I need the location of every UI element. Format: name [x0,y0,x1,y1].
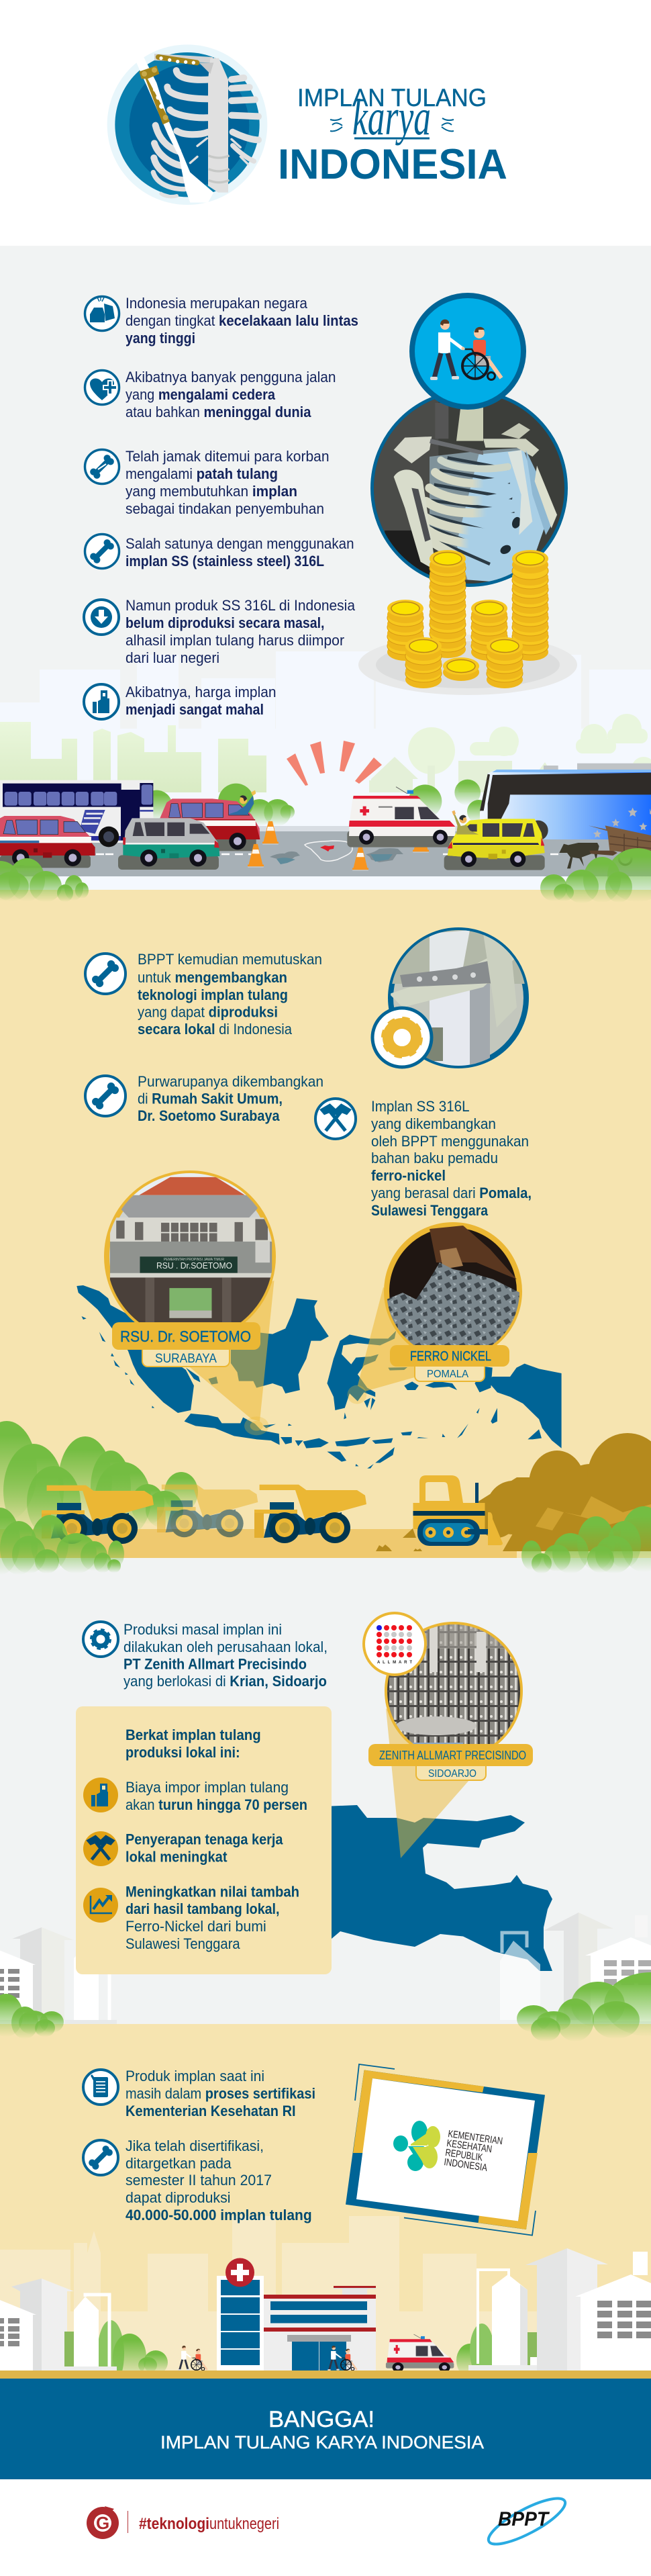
icon + text: BPPT decision: secara lokal di Indonesia [138,1021,293,1038]
icon: down arrow + text 5: dari luar negeri [126,649,219,666]
icon: crash + text 1: yang tinggi [126,330,195,347]
logo: BPPT [483,2491,570,2552]
icon: heart + text 2: atau bahkan meninggal dunia [126,404,311,420]
vehicles: ambulance, bus, van and ox cart [347,764,651,870]
icon + text: BPPT decision [85,951,322,1038]
dump trucks [42,1485,366,1544]
trees: section 3 bottom [0,1972,651,2041]
pale city silhouette: section 4 [0,2216,651,2371]
icon + text: mass production: yang berlokasi di Krian, Sidoarjo [123,1673,327,1690]
logo: hashtag G: G [96,2513,109,2533]
hospital scene: right buildings and trees [456,2248,651,2377]
logo: hashtag G [87,2506,279,2539]
label: Ferro Nickel Pomala: POMALA [427,1369,468,1380]
icon + text: ferro-nickel material: oleh BPPT menggunakan [371,1133,529,1150]
icon: heart + text 2 [85,369,336,420]
photo circle: skeleton with implants [371,393,568,589]
icon + text: production target: Jika telah disertifikasi, [126,2137,264,2154]
icon: money hand + text 6: menjadi sangat mahal [126,701,264,718]
label: Zenith Allmart Precisindo Sidoarjo: ZENITH ALLMART PRECISINDO [379,1749,526,1762]
hospital scene: left buildings and trees [0,2279,168,2387]
icon: down arrow + text 5 [84,597,356,666]
label: RSU Dr. Soetomo Surabaya: SURABAYA [155,1352,217,1366]
framed logo: Kementerian Kesehatan: KEMENTERIAN [447,2128,503,2147]
foreground trees: mine scene [0,1506,651,1575]
map: East Java [332,1708,552,1971]
icon + text: mass production: PT Zenith Allmart Precisindo [123,1656,307,1672]
title: INDONESIA [278,141,507,188]
panel: benefits [76,1706,332,1974]
city silhouette: pale background of section 1 [0,651,651,890]
icon + text: BPPT decision: teknologi implan tulang [138,986,288,1003]
mine scene: back trees, ground and mountain [0,1421,651,1558]
icon + text: ferro-nickel material: yang berasal dari Pomala, [371,1185,532,1201]
green city and trees behind road scene [0,714,651,792]
icon + text: BPPT decision: yang dapat diproduksi [138,1003,278,1021]
vehicles: left traffic [0,780,295,870]
alert rays [287,741,382,786]
panel: benefits: Biaya impor implan tulang [126,1779,289,1796]
panel: benefits: Berkat implan tulang [126,1727,261,1743]
icon: broken bone + text 3: yang membutuhkan implan [126,483,297,500]
label: Ferro Nickel Pomala: FERRO NICKEL [410,1349,491,1364]
title: karya [352,89,431,146]
map: Indonesia with location cones [77,1281,562,1469]
icon: broken bone + text 3: sebagai tindakan penyembuhan [126,500,324,517]
icon + text: mass production: Produksi masal implan ini [123,1621,282,1638]
icon + text: mass production: dilakukan oleh perusahaan lokal, [123,1639,328,1655]
icon + text: ferro-nickel material: bahan baku pemadu [371,1150,498,1166]
icon + text: ferro-nickel material [315,1098,532,1219]
banner: closing message [0,2379,651,2479]
icon + text: production target: ditargetkan pada [126,2155,232,2172]
framed logo: Kementerian Kesehatan: KESEHATAN [446,2137,493,2155]
panel: benefits: produksi lokal ini: [126,1744,240,1761]
ground strip [0,2371,651,2379]
icon + text: certification [83,2068,315,2119]
icon: heart + text 2: yang mengalami cedera [126,386,276,403]
icon + text: ferro-nickel material: ferro-nickel [371,1167,446,1184]
label: Zenith Allmart Precisindo Sidoarjo [368,1744,533,1780]
icon: down arrow + text 5: alhasil implan tulang harus diimpor [126,632,344,649]
icon: broken bone + text 3: mengalami patah tulang [126,465,278,482]
banner: closing message: BANGGA! [268,2407,374,2432]
panel: benefits: Ferro-Nickel dari bumi [126,1918,266,1935]
photo circle: RSU Dr. Soetomo: RSU . Dr.SOETOMO [156,1260,232,1271]
icon: bone + text 4: Salah satunya dengan menggunakan [126,535,354,552]
label: RSU Dr. Soetomo Surabaya [112,1322,260,1367]
logo: BPPT: BPPT [498,2508,550,2530]
title: IMPLAN TULANG [297,84,487,111]
panel: benefits: Meningkatkan nilai tambah [126,1883,299,1900]
icon + text: production target: 40.000-50.000 implan tulang [126,2207,312,2223]
label: RSU Dr. Soetomo Surabaya: RSU. Dr. SOETOMO [120,1328,251,1345]
banner: closing message: IMPLAN TULANG KARYA INDONESIA [160,2432,484,2452]
icon + text: prototype at hospital: Purwarupanya dikembangkan [138,1073,323,1090]
coin stacks [358,550,577,695]
icon + text: mass production [83,1621,328,1690]
icon + text: ferro-nickel material: Implan SS 316L [371,1098,470,1115]
icon: bone + text 4 [85,535,354,569]
icon + text: certification: masih dalam proses sertifikasi [126,2085,315,2102]
panel: benefits: akan turun hingga 70 persen [126,1796,307,1813]
icon: broken bone + text 3: Telah jamak ditemui para korban [126,448,329,465]
logo: hashtag G: #teknologi [139,2515,209,2533]
icon + text: production target: dapat diproduksi [126,2189,231,2206]
photo circle: Zenith Allmart factory [386,1622,520,1759]
icon: down arrow + text 5: Namun produk SS 316L di Indonesia [126,597,356,614]
logo circle: Allmart: ALLMART [377,1661,412,1665]
photo circle: RSU Dr. Soetomo [104,1170,276,1322]
icon + text: BPPT decision: untuk mengembangkan [138,969,287,986]
icon: money hand + text 6: Akibatnya, harga implan [126,684,277,700]
icon + text: prototype at hospital: di Rumah Sakit Umum, [138,1091,283,1107]
hazard: cones, puddles and body outline [248,821,429,871]
icon + text: production target [83,2137,312,2223]
foreground trees: road scene [0,848,651,903]
icon: crash + text 1 [85,295,358,347]
icon: bone + text 4: implan SS (stainless steel) 316L [126,553,324,569]
logo: hashtag G: untuknegeri [209,2515,279,2533]
hospital building [178,2258,376,2371]
icon: broken bone + text 3 [85,448,329,517]
photo circle: ferro nickel [387,1225,520,1363]
icon + text: certification: Kementerian Kesehatan RI [126,2103,296,2119]
framed logo: Kementerian Kesehatan [346,2064,545,2236]
bulldozer [413,1475,503,1546]
title [278,84,507,188]
header illustration: ribcage with implants [107,44,267,205]
photo circle: RSU Dr. Soetomo: PEMERINTAH PROPINSI JAWA TIMUR [164,1258,224,1262]
icon + text: ferro-nickel material: Sulawesi Tenggara [371,1202,489,1219]
icon: money hand + text 6 [84,684,277,719]
panel: benefits: Penyerapan tenaga kerja [126,1831,283,1848]
panel: benefits: dari hasil tambang lokal, [126,1900,279,1917]
panel: benefits: Sulawesi Tenggara [126,1935,240,1952]
framed logo: Kementerian Kesehatan: INDONESIA [443,2156,488,2174]
icon + text: prototype at hospital: Dr. Soetomo Surabaya [138,1107,280,1124]
icon: crash + text 1: dengan tingkat kecelakaan lalu lintas [126,312,358,329]
icon + text: BPPT decision: BPPT kemudian memutuskan [138,951,322,968]
logo circle: Allmart [364,1613,425,1675]
road [0,826,651,876]
icon + text: production target: semester II tahun 2017 [126,2172,272,2189]
photo circle: bone plate with gear badge [372,930,530,1071]
circle: wheelchair illustration [412,295,523,407]
label: Ferro Nickel Pomala [390,1345,509,1381]
icon + text: ferro-nickel material: yang dikembangkan [371,1115,496,1132]
label: Zenith Allmart Precisindo Sidoarjo: SIDOARJO [428,1768,477,1780]
icon: down arrow + text 5: belum diproduksi secara masal, [126,614,325,631]
ambulance small [386,2334,454,2373]
bottom of section 3: buildings and trees [0,1913,651,2024]
panel: benefits: lokal meningkat [126,1848,228,1866]
framed logo: Kementerian Kesehatan: REPUBLIK [444,2147,483,2164]
icon: heart + text 2: Akibatnya banyak pengguna jalan [126,369,336,385]
icon + text: prototype at hospital [85,1073,323,1124]
icon + text: certification: Produk implan saat ini [126,2068,264,2084]
icon: crash + text 1: Indonesia merupakan negara [126,295,308,312]
